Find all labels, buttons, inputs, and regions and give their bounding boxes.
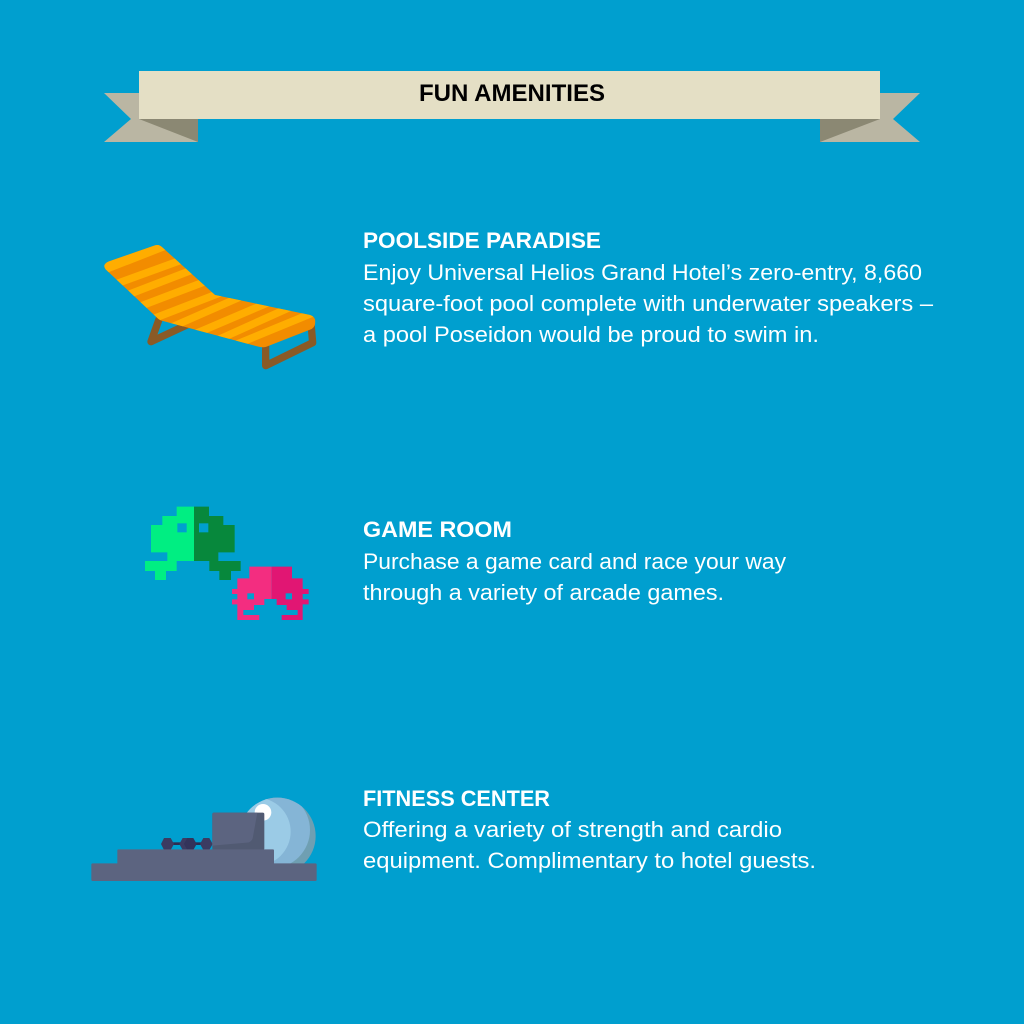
game room text xyxy=(363,517,786,605)
description: square-foot pool complete with underwater speakers – xyxy=(363,291,934,316)
banner ribbon xyxy=(139,71,880,119)
icon: arcade invaders xyxy=(145,507,309,620)
lounger legs xyxy=(151,319,313,366)
description: through a variety of arcade games. xyxy=(363,580,724,605)
banner right tail xyxy=(820,93,920,142)
icon: sun lounger xyxy=(104,245,316,370)
title banner xyxy=(104,71,920,142)
dumbbells xyxy=(161,838,213,850)
banner left tail xyxy=(104,93,198,142)
description xyxy=(363,817,816,873)
banner left fold xyxy=(139,119,198,142)
green invader xyxy=(145,507,241,580)
infographic canvas xyxy=(91,71,934,881)
banner right fold xyxy=(820,119,880,142)
description xyxy=(363,260,934,347)
lounger cushion xyxy=(104,245,316,348)
weight bench box xyxy=(212,813,264,850)
description: Enjoy Universal Helios Grand Hotel’s zero-entry, 8,660 xyxy=(363,260,922,285)
description: Purchase a game card and race your way xyxy=(363,549,786,574)
description: a pool Poseidon would be proud to swim in. xyxy=(363,322,819,347)
heading: GAME ROOM xyxy=(363,517,512,542)
description xyxy=(363,549,786,605)
heading: POOLSIDE PARADISE xyxy=(363,228,601,253)
poolside paradise text xyxy=(363,228,934,347)
steps platform xyxy=(91,849,317,881)
heading: FITNESS CENTER xyxy=(363,786,550,811)
description: Offering a variety of strength and cardio xyxy=(363,817,782,842)
description: equipment. Complimentary to hotel guests. xyxy=(363,848,816,873)
pink invader xyxy=(232,567,309,620)
fitness center text xyxy=(363,786,816,873)
title: FUN AMENITIES xyxy=(419,80,605,107)
icon: fitness equipment xyxy=(91,792,317,881)
exercise ball xyxy=(247,798,316,864)
